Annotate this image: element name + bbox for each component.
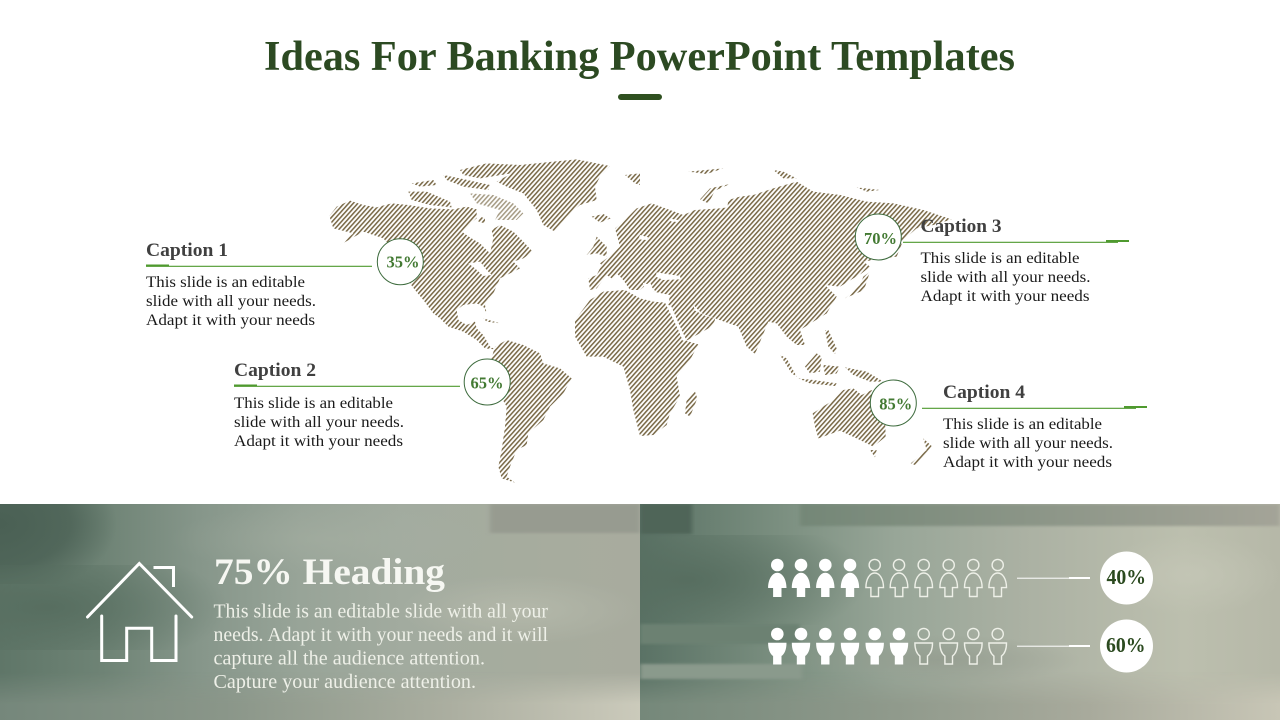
striped world map — [330, 159, 952, 482]
caption 1: This slide is an editable — [146, 274, 305, 291]
caption 1: slide with all your needs. — [146, 293, 316, 310]
caption 2: This slide is an editable — [234, 395, 393, 412]
title underline — [618, 94, 662, 100]
badge 70% — [855, 214, 901, 260]
caption 4: Caption 4 — [943, 382, 1026, 403]
panel: right blurred photo background — [640, 504, 1280, 720]
caption 4: slide with all your needs. — [943, 435, 1113, 452]
badge 70%: 70% — [864, 229, 897, 248]
left panel text block — [214, 600, 548, 693]
left panel text block: Capture your audience attention. — [214, 671, 476, 693]
connector line 40% — [1017, 577, 1090, 579]
connector line 60% — [1017, 645, 1090, 647]
icon: house — [88, 564, 192, 660]
people row 40% — [768, 559, 1006, 597]
badge 60% — [1100, 620, 1153, 672]
left panel text block: needs. Adapt it with your needs and it will — [214, 624, 548, 646]
badge 60%: 60% — [1106, 633, 1146, 657]
badge 65%: 65% — [470, 374, 504, 392]
caption 2: Adapt it with your needs — [234, 433, 403, 450]
badge 85%: 85% — [879, 394, 912, 414]
left panel text block: This slide is an editable slide with all your — [214, 600, 548, 622]
caption 3 — [903, 216, 1129, 305]
caption 1: Caption 1 — [146, 240, 228, 261]
people row 60% — [768, 628, 1006, 664]
caption 2: slide with all your needs. — [234, 414, 404, 431]
heading: 75% Heading: 75% Heading — [214, 551, 445, 592]
badge 40%: 40% — [1106, 565, 1146, 589]
panel: left blurred photo background — [0, 504, 640, 720]
left panel text block: capture all the audience attention. — [214, 648, 485, 670]
caption 1 — [146, 240, 372, 329]
caption 2: Caption 2 — [234, 360, 316, 381]
caption 4 — [922, 382, 1147, 471]
caption 3: This slide is an editable — [920, 250, 1080, 267]
caption 2 — [234, 360, 460, 450]
caption 3: Caption 3 — [920, 216, 1002, 237]
title: Ideas For Banking PowerPoint Templates — [264, 34, 1015, 80]
caption 1: Adapt it with your needs — [146, 312, 315, 329]
badge 65% — [464, 359, 510, 405]
badge 35% — [377, 239, 423, 285]
caption 4: Adapt it with your needs — [943, 454, 1112, 471]
caption 3: slide with all your needs. — [920, 269, 1090, 286]
badge 40% — [1100, 552, 1153, 604]
caption 4: This slide is an editable — [943, 416, 1102, 433]
caption 3: Adapt it with your needs — [920, 288, 1090, 305]
badge 85% — [870, 380, 916, 426]
badge 35%: 35% — [386, 252, 420, 272]
